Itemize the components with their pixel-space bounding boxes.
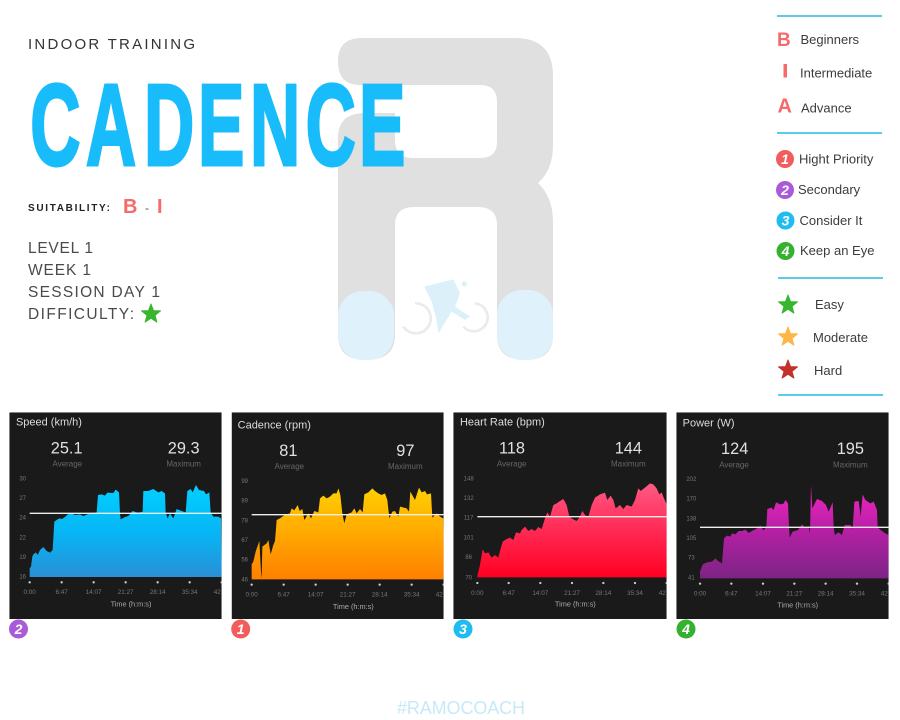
legend: difficulty: Hard — [814, 363, 842, 378]
panel: speed chart: Time (h:m:s) — [111, 599, 151, 608]
panel: cadence chart: 67 — [241, 538, 249, 544]
panel: heart rate chart: 101 — [464, 535, 474, 541]
panel: heart rate chart: 28:14 — [595, 590, 612, 597]
suitability line: B — [123, 196, 137, 218]
panel: cadence chart: Average — [275, 462, 305, 471]
panel: heart rate chart: 21:27 — [564, 590, 580, 597]
panel: power chart: Power (W) — [683, 417, 735, 429]
legend: priority: 1 — [781, 151, 789, 167]
panel: power chart: Average — [719, 460, 749, 469]
title: cadence: CADENCE — [30, 61, 405, 191]
panel: power chart: 41 — [688, 576, 695, 582]
legend: priority: 2 — [780, 182, 789, 198]
panel: speed chart: 6:47 — [56, 589, 68, 596]
badge: 1 — [231, 620, 250, 638]
panel: cadence chart: Maximum — [388, 462, 423, 471]
legend: difficulty: Easy — [815, 297, 844, 312]
panel: heart rate chart: 132 — [464, 496, 474, 502]
panel: speed chart: 19 — [19, 555, 27, 561]
legend: levels: Beginners — [800, 32, 860, 47]
speed area chart — [30, 485, 222, 577]
session details: LEVEL 1 — [28, 240, 93, 257]
panel: cadence chart: 56 — [241, 558, 249, 564]
legend: levels: B — [777, 30, 791, 51]
panel: cadence chart: 0:00 — [246, 592, 258, 599]
legend: priority: Keep an Eye — [800, 243, 874, 258]
panel: power chart: 170 — [686, 497, 697, 503]
panel: speed chart: 24 — [19, 516, 27, 522]
panel: speed chart: 29.3 — [168, 439, 200, 457]
panel: cadence chart: 89 — [241, 499, 249, 505]
footer hashtag: #RAMOCOACH — [397, 698, 525, 718]
panel: speed chart: 22 — [19, 535, 27, 541]
logo letter R — [338, 38, 553, 360]
legend: levels — [777, 16, 882, 133]
panel: heart rate chart: 42:54 — [659, 590, 675, 597]
logo left foot — [338, 291, 394, 360]
badge: 2: 2 — [14, 621, 23, 637]
panel: power chart: Maximum — [833, 460, 868, 469]
heart rate area chart — [477, 483, 667, 577]
panel: heart rate chart: Average — [497, 460, 527, 469]
legend: priority — [776, 150, 883, 278]
legend: levels: Advance — [801, 100, 852, 116]
panel: speed chart: Maximum — [166, 460, 201, 469]
panel: cadence chart: 99 — [241, 479, 249, 485]
panel: power chart: 21:27 — [786, 591, 803, 598]
panel: power chart: 14:07 — [755, 591, 771, 598]
cadence area chart — [252, 488, 444, 579]
icon: green star — [141, 304, 161, 322]
badge: 4: 4 — [681, 621, 690, 637]
legend: priority: Hight Priority — [799, 152, 874, 166]
panel: heart rate chart: Maximum — [611, 460, 646, 469]
panel: cadence chart: 78 — [241, 518, 249, 524]
logo cyclist icon — [403, 279, 488, 333]
panel: speed chart: 27 — [19, 496, 27, 502]
panel: heart rate chart — [453, 412, 675, 619]
badge: 1: 1 — [237, 621, 245, 637]
badge: 2 — [9, 620, 28, 638]
badge: 4 — [676, 620, 696, 638]
session details: SESSION DAY 1 — [28, 284, 160, 301]
panel: heart rate chart: 118 — [499, 439, 525, 457]
panel: speed chart: 28:14 — [150, 589, 166, 596]
panel: power chart: 28:14 — [818, 591, 834, 598]
panel: cadence chart: 21:27 — [340, 592, 356, 599]
background logo: letter R with cyclist — [338, 38, 553, 360]
legend: levels: Intermediate — [800, 66, 872, 80]
panel: power chart: 0:00 — [694, 591, 707, 598]
panel: power chart: 73 — [688, 556, 695, 562]
badge: 3 — [454, 620, 472, 638]
panel: cadence chart: 14:07 — [308, 592, 324, 599]
label: indoor training: INDOOR TRAINING — [28, 36, 195, 53]
logo right foot — [497, 290, 553, 360]
panel: heart rate chart: 86 — [465, 555, 473, 561]
suitability line: I — [157, 196, 163, 218]
session details: WEEK 1 — [28, 262, 91, 279]
panel: speed chart: 0:00 — [24, 589, 36, 596]
session details — [28, 240, 161, 323]
suitability line: - — [145, 201, 149, 215]
panel: speed chart: Speed (km/h) — [16, 417, 82, 429]
suitability line — [28, 196, 163, 218]
panel: power chart: 35:34 — [849, 591, 865, 598]
panel: cadence chart: 42:54 — [436, 592, 452, 599]
panel: cadence chart: 46 — [241, 577, 249, 583]
panel: power chart: 105 — [686, 536, 697, 542]
legend: difficulty: Moderate — [813, 330, 868, 345]
panel: speed chart: 42:54 — [214, 589, 230, 596]
panel: heart rate chart: 70 — [465, 575, 473, 581]
panel: heart rate chart: 144 — [615, 439, 642, 457]
badge: 3: 3 — [459, 621, 467, 637]
panel: heart rate chart: 148 — [464, 476, 474, 482]
legend: difficulty — [778, 295, 883, 395]
panel: speed chart: 21:27 — [118, 589, 134, 596]
power area chart — [700, 485, 889, 578]
panel: cadence chart: 35:34 — [404, 592, 420, 599]
panel: power chart: 138 — [686, 516, 697, 522]
legend: priority: 4 — [781, 243, 790, 259]
panel: speed chart: 35:34 — [182, 589, 198, 596]
panel: heart rate chart: Time (h:m:s) — [555, 600, 596, 609]
panel: cadence chart — [232, 412, 452, 619]
panel: speed chart: 30 — [19, 476, 27, 482]
suitability line: SUITABILITY: — [28, 203, 110, 214]
panel: cadence chart: Time (h:m:s) — [333, 602, 374, 611]
panel: power chart — [676, 412, 897, 619]
panel: speed chart: 25.1 — [51, 439, 83, 457]
panel: power chart: 42:54 — [881, 591, 897, 598]
legend: levels: A — [778, 96, 792, 118]
panel: heart rate chart: Heart Rate (bpm) — [460, 417, 545, 429]
panel: heart rate chart: 14:07 — [532, 590, 549, 597]
panel: cadence chart: 6:47 — [278, 592, 290, 599]
panel: heart rate chart: 0:00 — [471, 590, 484, 597]
panel: speed chart — [9, 412, 230, 619]
legend: priority: 3 — [782, 212, 790, 228]
panel: speed chart: 14:07 — [86, 589, 102, 596]
legend: priority: Consider It — [800, 213, 863, 228]
legend: priority: Secondary — [798, 182, 861, 197]
panel: heart rate chart: 117 — [464, 516, 474, 522]
panel: cadence chart: 81 — [279, 442, 297, 460]
panel: cadence chart: 97 — [396, 442, 414, 460]
panel: power chart: 202 — [686, 477, 697, 483]
session details: DIFFICULTY: — [28, 306, 134, 323]
panel: heart rate chart: 6:47 — [503, 590, 515, 597]
panel: speed chart: Average — [53, 460, 83, 469]
panel: heart rate chart: 35:34 — [627, 590, 643, 597]
panel: speed chart: 16 — [19, 575, 27, 581]
panel: cadence chart: 28:14 — [372, 592, 388, 599]
panel: cadence chart: Cadence (rpm) — [238, 419, 311, 431]
panel: power chart: 124 — [721, 440, 748, 458]
panel: power chart: Time (h:m:s) — [777, 600, 818, 609]
panel: power chart: 195 — [837, 440, 864, 458]
panel: power chart: 6:47 — [725, 591, 738, 598]
